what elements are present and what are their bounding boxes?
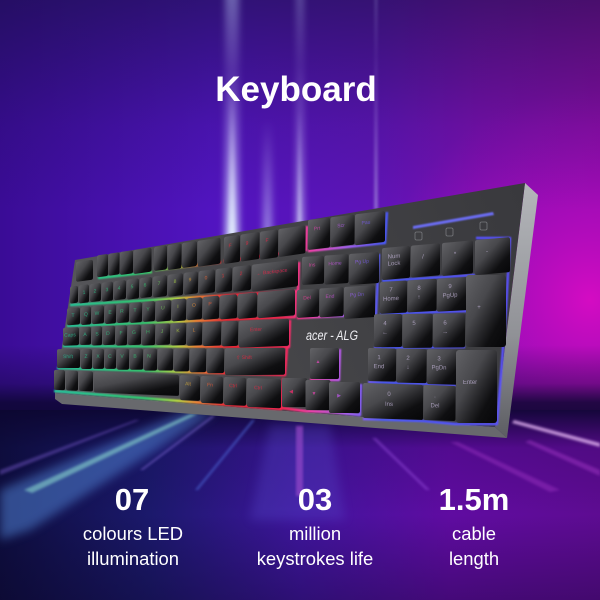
LED indicator strip [413,212,494,240]
keys: bottom row with spacebar: Alt [185,381,192,388]
keys: numeric keypad: 0 [387,392,391,398]
keys: arrow cluster: ▶ [337,393,341,399]
keys: numeric keypad: 3 [437,356,441,362]
background: reflective floor with light rays [0,410,600,600]
keys: insert, home, page up: Home [328,260,342,267]
keys: home row: Caps [64,332,76,339]
keys: numeric keypad: PgUp [442,293,458,299]
keys: shift row: ⇧ Shift [236,355,252,361]
keys: numeric keypad: Del [430,403,440,410]
keys: bottom row with spacebar: Ctrl [229,383,237,389]
keys: shift row: Shift [63,354,74,360]
keys: numeric keypad: 5 [412,321,416,327]
stat: keystrokes life: million [289,523,341,544]
keys: escape [76,260,93,282]
keys: shift row: ZXCVBN [84,354,151,360]
keys: insert, home, page up [302,252,379,288]
keys: numeric keypad: / [422,255,424,261]
keys: bottom row with spacebar: Fn [207,382,213,388]
keyboard chassis [55,183,538,438]
keys: numeric keypad: Enter [463,380,477,386]
keys: print screen, scroll lock, pause [308,211,385,251]
keys: numeric keypad: 1 [377,355,381,361]
keys: numeric keypad: ↑ [418,295,420,301]
keys: numeric keypad: 9 [448,284,452,290]
keys: numeric keypad: 6 [443,321,447,327]
keys: insert, home, page up: Ins [309,262,316,269]
stat: LED colours: 07 [115,482,149,517]
keys: numeric keypad: . [434,393,436,399]
backlight glow under keys [54,212,510,424]
keys: numeric keypad: 2 [406,356,410,362]
keys: numeric keypad: 8 [417,286,421,292]
keys: delete, end, page down [297,285,375,322]
keys: number row: 123456789012 [83,271,243,296]
stat: cable length [439,482,509,569]
stat: keystrokes life: 03 [298,482,332,517]
keys: delete, end, page down: End [326,294,335,300]
keys: QWERTY row: TQWERTYUIOP [71,301,212,319]
keys: insert, home, page up: Pg Up [355,259,369,266]
stat: LED colours: illumination [87,548,179,569]
keys: numeric keypad: ← [382,330,388,336]
keys: numeric keypad: Home [383,296,400,303]
keys: function row: F9F [228,238,269,249]
background: purple to magenta wall [0,0,600,420]
keys: bottom row with spacebar [54,370,281,408]
stat: keystrokes life: keystrokes life [257,548,373,569]
keys: numeric keypad [363,237,510,423]
keys: numeric keypad: PgDn [431,365,447,372]
stat: LED colours [83,482,183,569]
keys: bottom row with spacebar: Ctrl [254,385,262,391]
keys: numeric keypad: → [442,330,448,336]
keys: numeric keypad: ↓ [407,365,409,371]
keys: numeric keypad: 4 [383,321,387,327]
keys: numeric keypad: Num [388,254,400,261]
keys: numeric keypad: * [454,252,457,258]
title: Keyboard [215,70,377,109]
keys: delete, end, page down: Del [303,295,311,302]
keys: number row: ← Backspace [257,268,288,277]
stat: cable length: 1.5m [439,482,509,517]
keys: numeric keypad: Ins [385,402,393,408]
keys: QWERTY row [67,289,295,334]
keys: arrow cluster: ▼ [312,391,316,397]
stat: cable length: length [449,548,499,569]
keys: numeric keypad: - [486,249,488,255]
keys: home row: ASDFGHJKL [83,327,196,338]
stat: LED colours: colours LED [83,523,183,544]
keys: numeric keypad: Lock [388,260,401,268]
stat: cable length: cable [452,523,496,544]
keys: print screen, scroll lock, pause: Prt [314,226,321,232]
keys: print screen, scroll lock, pause: Pau [362,220,371,227]
logo: acer ALG: acer - ALG [306,328,358,343]
keys: arrow cluster: ◀ [289,389,293,395]
keys: home row: Enter [250,327,262,333]
keys: shift row [57,348,285,376]
keys: home row [63,319,289,355]
stat: keystrokes life [257,482,373,569]
keys: number row [70,259,298,314]
keyboard [54,183,538,438]
keys: print screen, scroll lock, pause: Scr [337,223,345,230]
keys: function row [97,225,306,283]
background: vertical light beams [225,0,377,260]
keys: numeric keypad: + [477,305,481,311]
keys: arrow cluster [282,348,360,413]
keys: arrow cluster: ▲ [316,359,320,365]
keys: numeric keypad: 7 [389,287,393,294]
keys: numeric keypad: End [374,364,384,370]
keys: delete, end, page down: Pg Dn [350,292,364,299]
